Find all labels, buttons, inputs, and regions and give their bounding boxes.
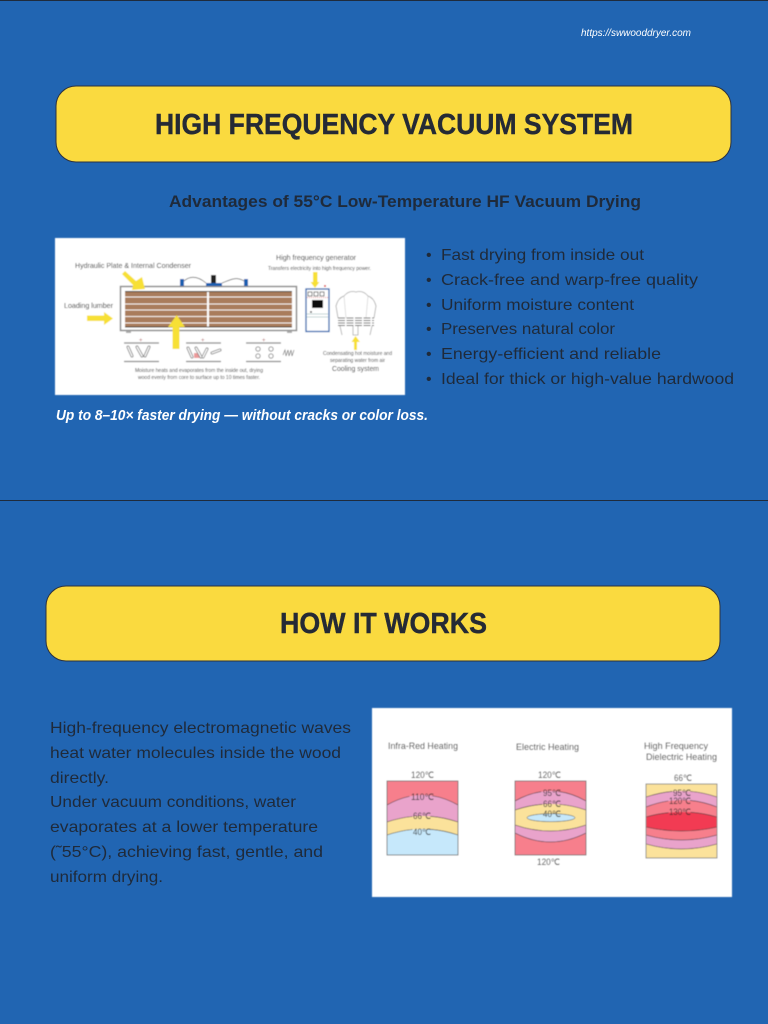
arrow: upward center — [168, 315, 185, 349]
label: hydraulic plate: Hydraulic Plate & Internal Condenser — [75, 261, 191, 270]
label: generator note: Transfers electricity into high frequency power. — [268, 266, 371, 272]
how it works banner — [46, 586, 720, 661]
bullet 4: Preserves natural color — [441, 321, 616, 338]
stage diagram one — [124, 343, 159, 362]
chart: electric heating — [515, 742, 586, 867]
bullet 6: • — [426, 371, 432, 388]
text block: explanation: uniform drying. — [50, 869, 163, 886]
chart: electric heating: 66℃ — [543, 799, 561, 809]
polarity marks: + — [262, 338, 266, 344]
arrow: hydraulic plate — [122, 271, 145, 290]
bullet 3: • — [426, 297, 432, 314]
arrow: loading lumber — [87, 312, 113, 325]
heading: HOW IT WORKS — [280, 608, 487, 640]
chart: electric heating: 120℃ — [538, 770, 561, 780]
chart: electric heating: 40℃ — [543, 809, 561, 819]
subtitle: Advantages of 55°C Low-Temperature HF Vacuum Drying — [169, 192, 641, 211]
text block: explanation: directly. — [50, 770, 109, 787]
chart: infra-red heating: Infra-Red Heating — [388, 741, 458, 752]
website url: https://swwooddryer.com — [581, 27, 691, 39]
title: HIGH FREQUENCY VACUUM SYSTEM — [155, 109, 633, 141]
label: high frequency generator: High frequency generator — [276, 253, 356, 262]
generator cabinet — [306, 285, 329, 332]
chart: high frequency dielectric heating: 66℃ — [674, 773, 692, 783]
text block: explanation: High-frequency electromagnetic waves — [50, 720, 351, 737]
chart: high frequency dielectric heating: 95℃ — [673, 788, 691, 798]
panel: system diagram — [55, 238, 405, 395]
bullet 5: Energy-efficient and reliable — [441, 346, 661, 363]
chart: infra-red heating: 40℃ — [413, 827, 431, 837]
arrow: generator — [310, 272, 320, 288]
kiln chamber — [120, 275, 296, 333]
label: loading lumber: Loading lumber — [64, 301, 113, 310]
chart: high frequency dielectric heating — [644, 741, 717, 858]
bullet 2: • — [426, 272, 432, 289]
bullet 1: Fast drying from inside out — [441, 247, 645, 264]
arrow: cooling system — [352, 336, 360, 350]
caption: speed claim: Up to 8–10× faster drying — without cracks or color loss. — [56, 408, 428, 424]
caption: moisture line two: wood evenly from core to surface up to 10 times faster. — [138, 375, 260, 381]
label: cooling system: Cooling system — [332, 364, 379, 373]
chart: high frequency dielectric heating: 120℃ — [669, 796, 691, 806]
bullet 1: • — [426, 247, 432, 264]
cooling tower — [336, 292, 376, 335]
bullet 4: • — [426, 321, 432, 338]
polarity marks: + — [139, 338, 143, 344]
text block: explanation: (˜55°C), achieving fast, gentle, and — [50, 844, 323, 861]
polarity marks: + — [201, 338, 205, 344]
chart: infra-red heating: 120℃ — [411, 770, 434, 780]
bullet 2: Crack-free and warp-free quality — [441, 272, 698, 289]
bullet list: advantages — [426, 247, 734, 388]
panel: heating comparison — [372, 708, 732, 897]
bullet 5: • — [426, 346, 432, 363]
bullet 3: Uniform moisture content — [441, 297, 635, 314]
chart: electric heating: 95℃ — [543, 788, 561, 798]
chart: electric heating: 120℃ — [537, 857, 560, 867]
title banner — [56, 86, 731, 162]
stage diagram two — [186, 343, 221, 362]
bullet 6: Ideal for thick or high-value hardwood — [441, 371, 734, 388]
text block: explanation: evaporates at a lower temperature — [50, 819, 318, 836]
chart: electric heating: Electric Heating — [516, 742, 579, 753]
stage diagram three — [246, 343, 294, 362]
chart: infra-red heating: 110℃ — [411, 792, 434, 802]
polarity marks — [139, 338, 266, 344]
caption: condensing line two: separating water from air — [330, 358, 385, 364]
text block: explanation — [50, 720, 351, 886]
text block: explanation: heat water molecules inside the wood — [50, 745, 341, 762]
chart: infra-red heating — [387, 741, 458, 855]
caption: condensing: Condensating hot moisture and — [323, 351, 392, 357]
text block: explanation: Under vacuum conditions, water — [50, 794, 297, 811]
caption: moisture: Moisture heats and evaporates from the inside out, drying — [135, 368, 263, 374]
chart: infra-red heating: 66℃ — [413, 811, 431, 821]
chart: high frequency dielectric heating: Dielectric Heating — [646, 752, 717, 763]
chart: high frequency dielectric heating: High Frequency — [644, 741, 708, 752]
chart: high frequency dielectric heating: 130℃ — [669, 807, 691, 817]
